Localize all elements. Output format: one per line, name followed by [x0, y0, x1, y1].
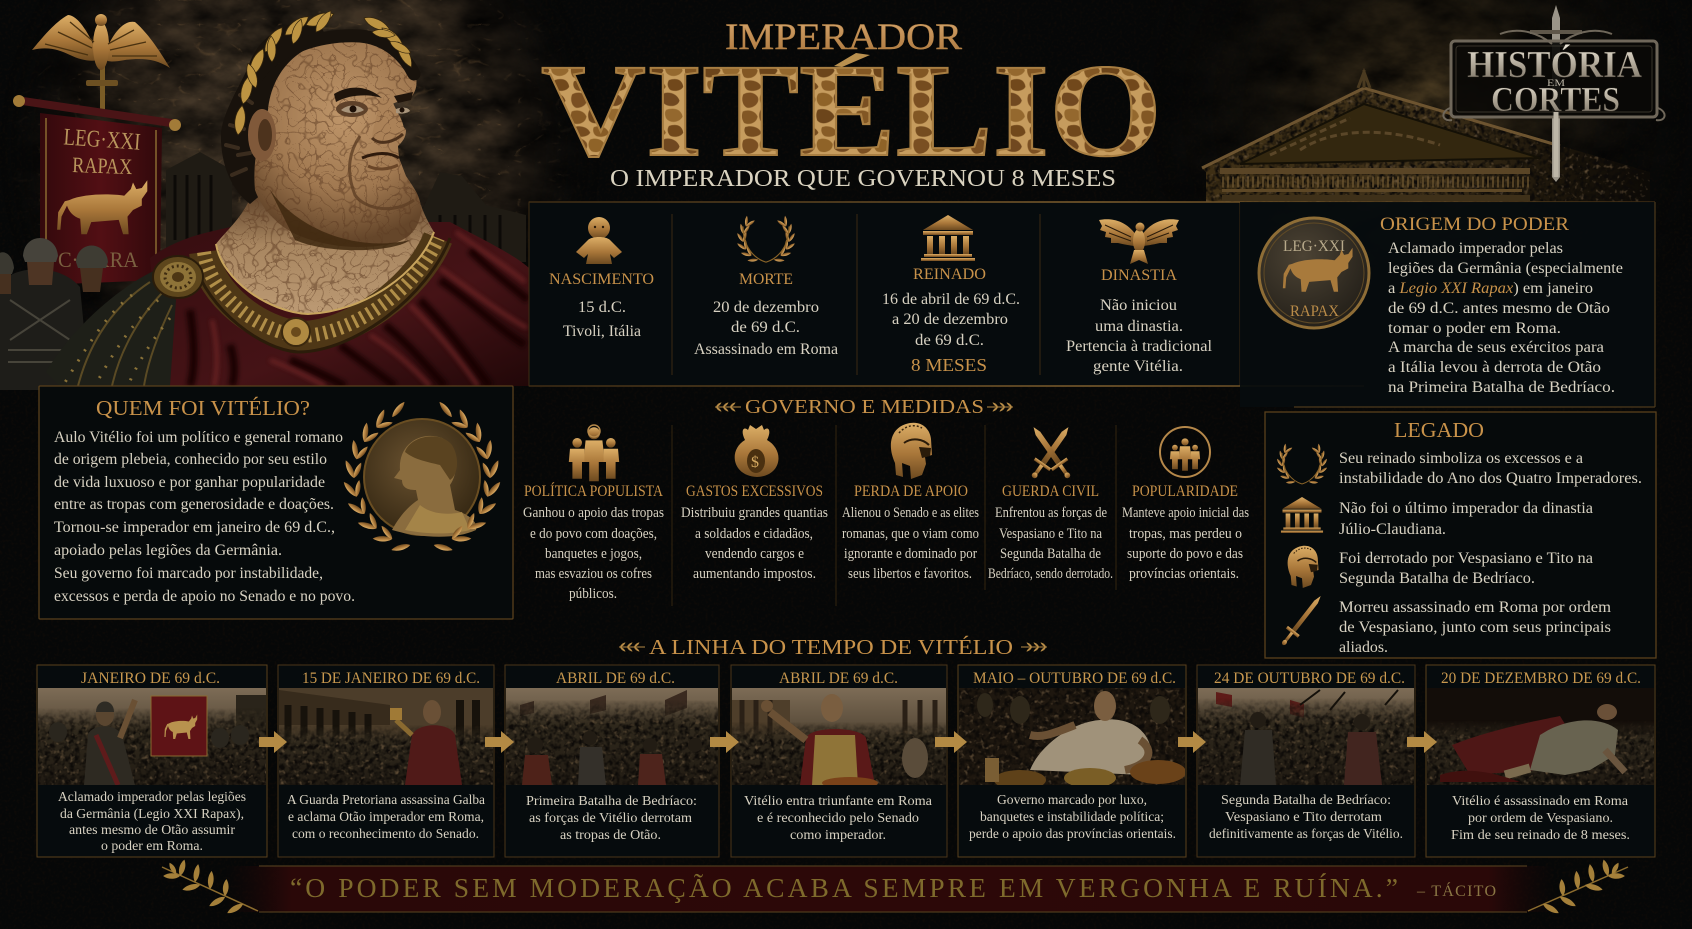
quote text: “O PODER SEM MODERAÇÃO ACABA SEMPRE EM VERGONHA E RUÍNA.” [290, 873, 1401, 903]
stat: morte: MORTE [739, 271, 793, 288]
card 3: abril primeira batalha: as tropas de Otão. [560, 828, 661, 843]
text: biography: Seu governo foi marcado por instabilidade, [54, 565, 323, 582]
title: VITÉLIO: VITÉLIO [541, 36, 1162, 184]
text: origem: Aclamado imperador pelas [1388, 240, 1563, 257]
hero illustration: emperor portrait with legion banner [0, 0, 600, 390]
standard with eagle and LEG XXI RAPAX banner: C·IPARA [58, 247, 138, 272]
text: biography: de origem plebeia, conhecido por seu estilo [54, 451, 327, 468]
text: origem: de 69 d.C. antes mesmo de Otão [1388, 300, 1610, 317]
stat: reinado [882, 215, 1020, 375]
text: biography: apoiado pelas legiões da Germânia. [54, 542, 282, 559]
heading: QUEM FOI VITÉLIO? [96, 396, 310, 420]
card 1: janeiro: o poder em Roma. [101, 839, 203, 854]
measure: política populista: Ganhou o apoio das tropas [523, 505, 664, 521]
card 5: maio outubro: MAIO – OUTUBRO DE 69 d.C. [973, 670, 1176, 687]
coin: Legio XXI Rapax: LEG·XXI [1283, 238, 1345, 255]
card 7: 20 de dezembro: por ordem de Vespasiano. [1468, 811, 1613, 826]
legado: wreath item [1276, 444, 1642, 487]
measure: perda de apoio: seus libertos e favoritos. [848, 566, 972, 582]
card 4: abril entrada em Roma: Vitélio entra triunfante em Roma [744, 794, 933, 809]
legado: sword item: Morreu assassinado em Roma por ordem [1339, 599, 1612, 616]
measure: popularidade [1122, 427, 1249, 582]
soldiers [0, 238, 108, 390]
standard with eagle and LEG XXI RAPAX banner [13, 14, 181, 285]
heading: governo e medidas: GOVERNO E MEDIDAS [745, 396, 984, 418]
legado: temple item: Não foi o último imperador da dinastia [1339, 500, 1593, 517]
legado: sword item: aliados. [1339, 639, 1388, 656]
measure: guerda civil: Segunda Batalha de [1000, 546, 1101, 562]
stat: morte: de 69 d.C. [731, 319, 800, 336]
card 6: 24 de outubro: 24 DE OUTUBRO DE 69 d.C. [1214, 670, 1405, 687]
gold collar [194, 232, 450, 352]
measure: gastos excessivos [681, 425, 828, 582]
standard with eagle and LEG XXI RAPAX banner: LEG·XXI [63, 124, 141, 156]
card 2: 15 de janeiro: e aclama Otão imperador em Roma, [288, 810, 484, 825]
stat: reinado: 8 MESES [911, 355, 987, 375]
legado: helmet item [1288, 546, 1593, 588]
logo: História em Cortes: HISTÓRIA [1467, 44, 1643, 86]
timeline [37, 665, 1655, 857]
measure: popularidade: províncias orientais. [1129, 566, 1239, 582]
stat: nascimento: 15 d.C. [578, 299, 626, 316]
measure: guerda civil: Vespasiano e Tito na [999, 526, 1102, 542]
title: IMPERADOR: IMPERADOR [725, 17, 962, 58]
title: VITÉLIO [542, 53, 1156, 158]
legado: helmet item: Foi derrotado por Vespasiano e Tito na [1339, 550, 1593, 567]
panel: legado: LEGADO [1394, 418, 1484, 442]
panel: stats [529, 202, 1655, 386]
card 6: 24 de outubro [1197, 665, 1415, 857]
measure: perda de apoio: PERDA DE APOIO [854, 483, 968, 500]
legado: wreath item: instabilidade do Ano dos Quatro Imperadores. [1339, 470, 1642, 487]
legado: temple item: Júlio-Claudiana. [1339, 521, 1446, 538]
card 6: 24 de outubro: Vespasiano e Tito derrotam [1225, 810, 1382, 825]
panel: origem do poder [1240, 202, 1655, 407]
temple illustration [1202, 70, 1650, 202]
timeline arrows [259, 731, 1437, 753]
heading: linha do tempo: A LINHA DO TEMPO DE VITÉLIO [649, 635, 1013, 659]
stat: reinado: a 20 de dezembro [892, 311, 1008, 328]
measure: popularidade: suporte do povo e das [1127, 546, 1243, 562]
text: origem [1388, 240, 1623, 396]
measure: guerda civil: Enfrentou as forças de [995, 505, 1107, 521]
panel: legado [1265, 412, 1656, 658]
text: biography: de vida luxuoso e por ganhar popularidade [54, 474, 325, 491]
measure: perda de apoio: romanas, que o viam como [842, 526, 979, 542]
measure: guerda civil: Bedríaco, sendo derrotado. [988, 566, 1113, 582]
text: origem: na Primeira Batalha de Bedríaco. [1388, 379, 1615, 396]
title block [541, 17, 1162, 192]
measure: política populista: banquetes e jogos, [545, 546, 642, 562]
measure: guerda civil [988, 422, 1113, 582]
subtitle: O IMPERADOR QUE GOVERNOU 8 MESES [610, 165, 1116, 192]
measure: guerda civil: GUERDA CIVIL [1002, 483, 1099, 500]
card 5: maio outubro: banquetes e instabilidade política; [980, 810, 1164, 825]
card 6: 24 de outubro: definitivamente as forças de Vitélio. [1209, 827, 1403, 842]
measure: política populista: públicos. [569, 586, 617, 602]
card 1: janeiro: antes mesmo de Otão assumir [69, 823, 235, 838]
coin: Legio XXI Rapax [1259, 218, 1369, 328]
measure: popularidade: tropas, mas perdeu o [1129, 526, 1242, 542]
laurel left [162, 859, 258, 916]
stat: morte: 20 de dezembro [713, 299, 819, 316]
card 1: janeiro: JANEIRO DE 69 d.C. [81, 670, 220, 687]
card 2: 15 de janeiro: 15 DE JANEIRO DE 69 d.C. [302, 670, 480, 687]
card 7: 20 de dezembro: 20 DE DEZEMBRO DE 69 d.C. [1441, 670, 1641, 687]
stat: reinado: REINADO [913, 266, 986, 283]
card 4: abril entrada em Roma: ABRIL DE 69 d.C. [779, 670, 898, 687]
stat: nascimento [549, 217, 654, 340]
text: biography: excessos e perda de apoio no Senado e no povo. [54, 588, 355, 605]
quote author: – TÁCITO [1416, 881, 1496, 900]
text: origem: legiões da Germânia (especialmente [1388, 260, 1623, 277]
card 3: abril primeira batalha: as forças de Vitélio derrotam [529, 811, 692, 826]
measure: política populista: POLÍTICA POPULISTA [524, 481, 663, 500]
card 6: 24 de outubro: Segunda Batalha de Bedríaco: [1221, 793, 1391, 808]
card 7: 20 de dezembro: Fim de seu reinado de 8 meses. [1451, 828, 1630, 843]
legado: wreath item: Seu reinado simboliza os excessos e a [1339, 450, 1583, 467]
shoulder armour [46, 268, 176, 386]
card 1: janeiro [37, 665, 267, 857]
measure: política populista [523, 425, 664, 602]
card 2: 15 de janeiro [278, 665, 494, 857]
card 5: maio outubro [958, 665, 1186, 857]
stat: dinastia: Pertencia à tradicional [1066, 338, 1213, 355]
panel: origem do poder: ORIGEM DO PODER [1380, 214, 1569, 235]
logo: História em Cortes [1443, 5, 1665, 182]
logo: História em Cortes: CORTES [1491, 80, 1620, 119]
card 1: janeiro: da Germânia (Legio XXI Rapax), [60, 807, 244, 822]
legado: temple item [1281, 497, 1593, 538]
stat: dinastia: uma dinastia. [1095, 318, 1183, 335]
measure: gastos excessivos: Distribuiu grandes quantias [681, 505, 828, 521]
text: biography: Aulo Vitélio foi um político e general romano [54, 429, 343, 446]
card 1: janeiro: Aclamado imperador pelas legiões [58, 790, 246, 805]
measure: política populista: mas esvaziou os cofres [535, 566, 652, 582]
hair [221, 20, 330, 204]
quote banner [162, 859, 1628, 916]
section: governo columns [523, 422, 1249, 606]
stat: dinastia: gente Vitélia. [1093, 358, 1183, 375]
text: biography [54, 429, 355, 605]
text: biography: Tornou-se imperador em janeiro de 69 d.C., [54, 519, 335, 536]
legado: sword item [1277, 591, 1612, 656]
card 5: maio outubro: Governo marcado por luxo, [997, 793, 1147, 808]
legado: helmet item: Segunda Batalha de Bedríaco. [1339, 570, 1535, 587]
stat: dinastia [1066, 219, 1213, 375]
card 3: abril primeira batalha: ABRIL DE 69 d.C. [556, 670, 675, 687]
measure: gastos excessivos: $ [751, 454, 759, 471]
stat: nascimento: NASCIMENTO [549, 271, 654, 288]
heading: governo e medidas [521, 396, 1265, 418]
measure: popularidade: Manteve apoio inicial das [1122, 505, 1249, 521]
logo: História em Cortes: EM [1547, 78, 1565, 88]
measure: gastos excessivos: aumentando impostos. [693, 566, 816, 582]
text: origem: tomar o poder em Roma. [1388, 320, 1561, 337]
neck and chest [216, 195, 434, 314]
card 5: maio outubro: perde o apoio das províncias orientais. [969, 827, 1176, 842]
toga [150, 222, 529, 386]
panel: quem foi Vitélio [39, 386, 513, 619]
card 7: 20 de dezembro: Vitélio é assassinado em Roma [1452, 794, 1629, 809]
measure: gastos excessivos: vendendo cargos e [705, 546, 804, 562]
stat: nascimento: Tivoli, Itália [563, 323, 641, 340]
card 4: abril entrada em Roma: como imperador. [790, 828, 886, 843]
measure: perda de apoio: Alienou o Senado e as elites [842, 505, 979, 521]
stat: dinastia: DINASTIA [1101, 267, 1177, 284]
heading: linha do tempo [38, 635, 1265, 659]
head [248, 36, 421, 250]
coin: Legio XXI Rapax: RAPAX [1290, 303, 1339, 320]
laurel crown [233, 8, 415, 136]
legado: sword item: de Vespasiano, junto com seus principais [1339, 619, 1611, 636]
laurel right [1528, 859, 1628, 916]
text: origem: a Itália levou à derrota de Otão [1388, 359, 1601, 376]
stat: morte [694, 216, 838, 358]
measure: perda de apoio: ignorante e dominado por [844, 546, 977, 562]
text: origem: a Legio XXI Rapax) em janeiro [1388, 280, 1593, 297]
measure: gastos excessivos: GASTOS EXCESSIVOS [686, 483, 823, 500]
brooch [153, 256, 203, 298]
card 4: abril entrada em Roma [731, 665, 947, 857]
card 2: 15 de janeiro: com o reconhecimento do Senado. [292, 827, 479, 842]
card 4: abril entrada em Roma: e é reconhecido pelo Senado [757, 811, 919, 826]
medallion: portrait in laurel wreath [342, 400, 502, 553]
measure: política populista: e do povo com doações, [530, 526, 657, 542]
stat: reinado: 16 de abril de 69 d.C. [882, 291, 1020, 308]
card 3: abril primeira batalha [505, 665, 719, 857]
text: biography: entre as tropas com generosidade e doações. [54, 496, 334, 513]
card 2: 15 de janeiro: A Guarda Pretoriana assassina Galba [287, 793, 486, 808]
card 3: abril primeira batalha: Primeira Batalha de Bedríaco: [526, 794, 697, 809]
text: origem: A marcha de seus exércitos para [1388, 339, 1604, 356]
measure: perda de apoio [842, 423, 979, 582]
standard with eagle and LEG XXI RAPAX banner: RAPAX [72, 152, 133, 179]
measure: popularidade: POPULARIDADE [1132, 483, 1238, 500]
stat: morte: Assassinado em Roma [694, 341, 838, 358]
card 7: 20 de dezembro [1426, 665, 1655, 857]
measure: gastos excessivos: a soldados e cidadãos, [695, 526, 813, 542]
stat: reinado: de 69 d.C. [915, 332, 984, 349]
stat: dinastia: Não iniciou [1100, 297, 1177, 314]
